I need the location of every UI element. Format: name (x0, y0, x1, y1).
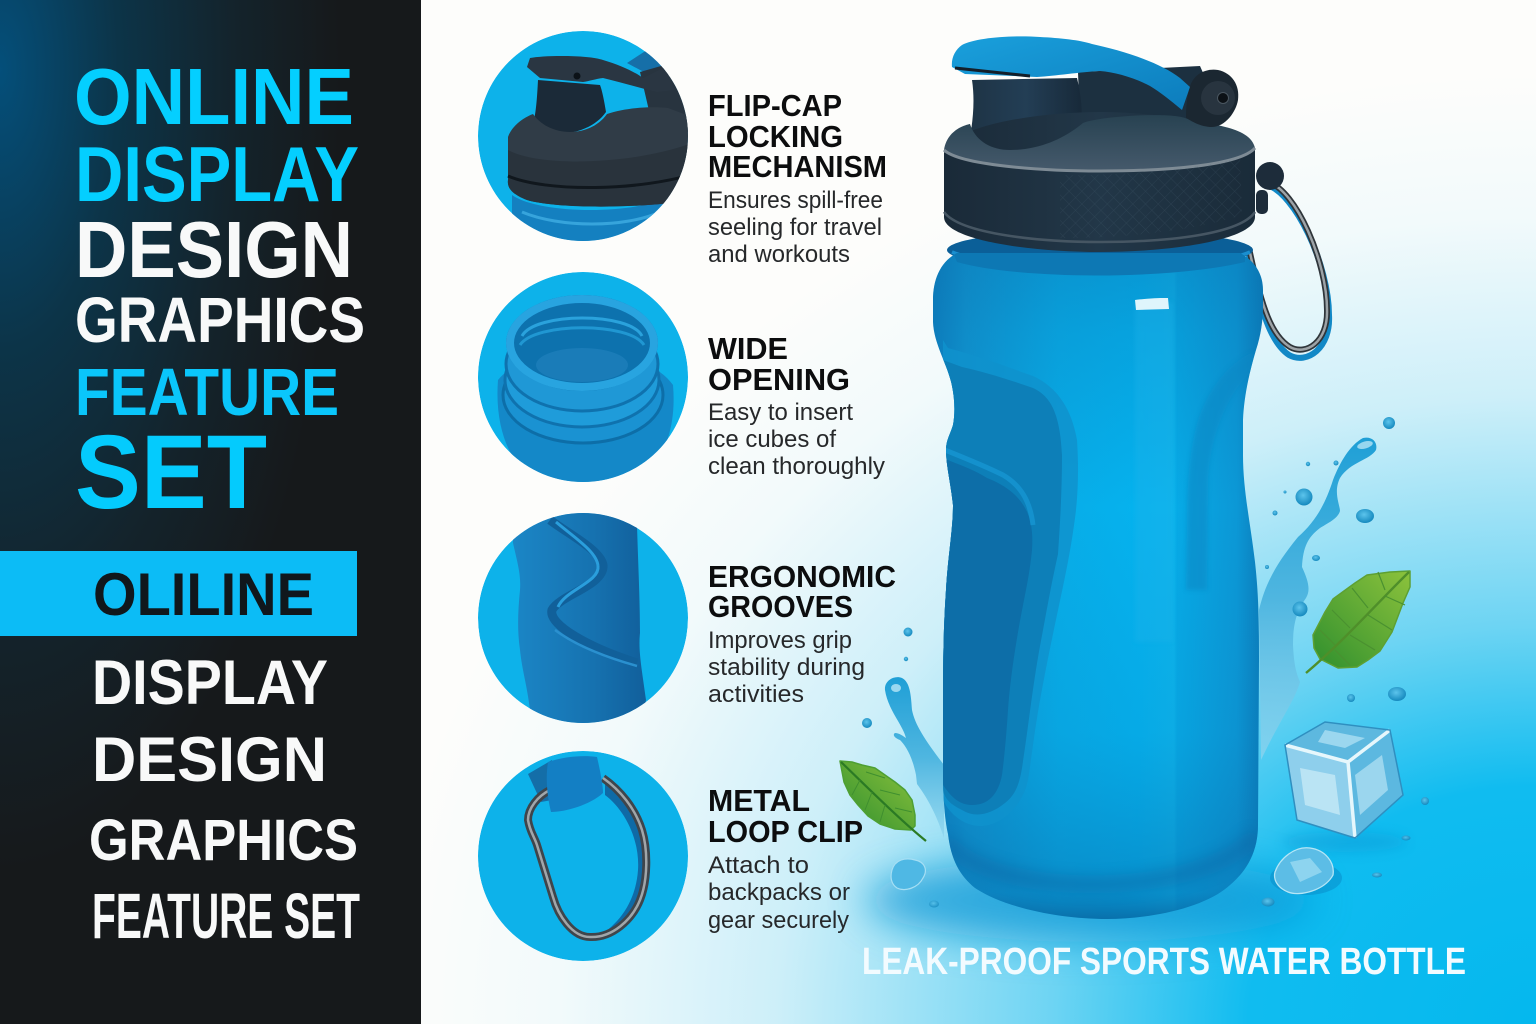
icon: metal clip detail circle (478, 751, 688, 961)
secondary title list (89, 648, 360, 952)
heading: METAL (708, 783, 810, 818)
main splash (1259, 438, 1376, 760)
description: Easy to insert (708, 399, 853, 426)
mint leaf (1306, 571, 1410, 673)
title: online display design graphics feature set: FEATURE (75, 355, 339, 430)
left water splash with leaf (840, 628, 944, 908)
water droplets (1262, 417, 1429, 906)
icon: wide opening detail circle (478, 272, 688, 485)
highlight bar: OLILINE (93, 561, 314, 628)
hinge back (1078, 66, 1215, 128)
bottle neck (947, 230, 1253, 270)
icon: flip-cap detail circle (478, 31, 700, 250)
bottle shadow glow (865, 858, 1315, 942)
description: seeling for travel (708, 214, 882, 241)
description: Attach to (708, 852, 809, 879)
heading (708, 331, 850, 397)
description (708, 399, 885, 480)
description (708, 187, 883, 268)
heading: OPENING (708, 362, 850, 397)
description (708, 852, 850, 934)
bottle cap collar (944, 112, 1255, 252)
secondary title list: FEATURE SET (92, 880, 360, 952)
heading: ERGONOMIC (708, 559, 896, 594)
grip groove (943, 340, 1078, 826)
heading: MECHANISM (708, 149, 887, 184)
flip spout (970, 78, 1082, 150)
small mint leaf (840, 761, 926, 841)
feature 3: ergonomic grooves (478, 505, 896, 730)
ice cube (1283, 722, 1407, 852)
title: online display design graphics feature set: DISPLAY (75, 130, 359, 218)
highlight bar (0, 551, 357, 636)
hinge (1186, 70, 1238, 127)
feature 1: flip-cap (478, 31, 887, 268)
central highlight (1135, 302, 1173, 642)
feature 4: metal loop clip (478, 751, 863, 961)
left splash (885, 677, 944, 838)
description: gear securely (708, 907, 849, 934)
ice chunk (1270, 848, 1342, 895)
description: stability during (708, 654, 865, 681)
description (708, 627, 865, 708)
description: clean thoroughly (708, 453, 885, 480)
shoulder neck shadow (954, 253, 1245, 276)
right groove (1186, 352, 1253, 590)
heading: LOCKING (708, 119, 843, 154)
title: online display design graphics feature set (74, 52, 365, 531)
main bottle (925, 36, 1329, 925)
title: online display design graphics feature set: ONLINE (74, 52, 354, 141)
title: online display design graphics feature set: SET (75, 414, 267, 531)
small ice chunk (891, 859, 925, 890)
description: backpacks or (708, 879, 850, 906)
description: Improves grip (708, 627, 852, 654)
metal loop ring (1248, 162, 1329, 358)
base shading (945, 835, 1256, 884)
secondary title list: DESIGN (92, 725, 327, 795)
heading: WIDE (708, 331, 788, 366)
description: and workouts (708, 241, 850, 268)
right water splash with leaf and ice (1259, 417, 1429, 906)
heading: FLIP-CAP (708, 88, 842, 123)
description: ice cubes of (708, 426, 836, 453)
heading (708, 559, 896, 624)
heading: LOOP CLIP (708, 814, 863, 849)
heading: GROOVES (708, 589, 853, 624)
secondary title list: DISPLAY (92, 648, 328, 718)
heading (708, 783, 863, 849)
secondary title list: GRAPHICS (89, 808, 358, 873)
bottle body (925, 245, 1270, 925)
description: activities (708, 681, 804, 708)
title: online display design graphics feature set: GRAPHICS (75, 284, 365, 356)
feature 2: wide opening (478, 272, 885, 485)
heading (708, 88, 887, 184)
description: Ensures spill-free (708, 187, 883, 214)
title: online display design graphics feature set: DESIGN (75, 205, 353, 294)
flip lid (952, 36, 1190, 110)
panel: left title column (0, 0, 421, 1024)
icon: ergonomic grooves detail circle (478, 505, 688, 730)
